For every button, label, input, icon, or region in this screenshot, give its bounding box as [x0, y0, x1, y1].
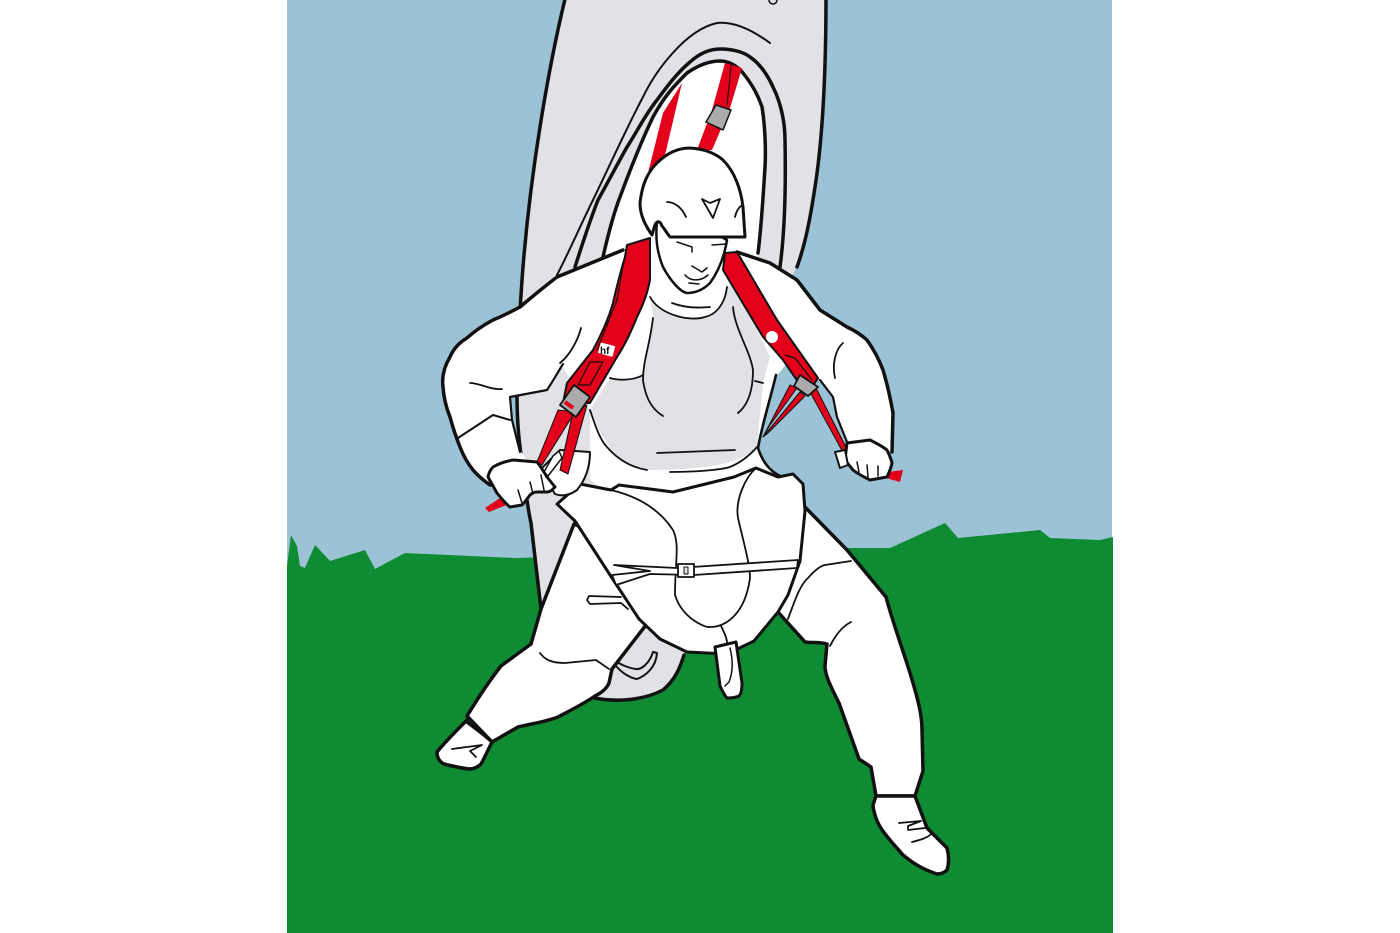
helmet [640, 148, 745, 237]
kayak deck line [557, 23, 770, 275]
right strap handle [835, 450, 848, 468]
left padded shoulder strap [537, 238, 650, 476]
grab loop [721, 626, 727, 643]
left strap buckle [560, 385, 590, 417]
left hand [485, 460, 555, 512]
rear harness straps [648, 63, 742, 173]
left arm [443, 250, 623, 495]
kayak bottom handle [616, 652, 657, 679]
kayak screw [769, 0, 777, 4]
strap logo [598, 342, 615, 357]
right padded shoulder strap [723, 252, 849, 456]
skirt waist belt [612, 560, 798, 585]
kayak standing upright [517, 0, 826, 700]
right leg and foot [760, 505, 948, 874]
belt buckle [678, 564, 694, 577]
grass ground [287, 523, 1113, 933]
right strap buckle [794, 375, 818, 396]
left leg pocket [587, 596, 628, 609]
grey buoyancy vest [590, 283, 770, 470]
cockpit opening [600, 61, 765, 275]
right arm [737, 252, 893, 452]
left leg and foot [437, 524, 660, 769]
cockpit rim [575, 49, 785, 267]
sky background [287, 0, 1112, 570]
right hand [835, 440, 903, 482]
strap pocket [578, 362, 603, 385]
right pull strap [810, 388, 849, 456]
strap logo: hf [600, 346, 610, 357]
face [656, 222, 727, 293]
right harness fan straps [763, 385, 805, 437]
head and helmet [640, 148, 745, 293]
torso drysuit [560, 238, 793, 500]
lower left straps [537, 410, 575, 465]
metal clip [544, 451, 562, 476]
hip pouch [540, 450, 590, 495]
rear strap buckle [706, 105, 731, 130]
strap eyelet [766, 331, 778, 343]
spray skirt [557, 468, 805, 698]
